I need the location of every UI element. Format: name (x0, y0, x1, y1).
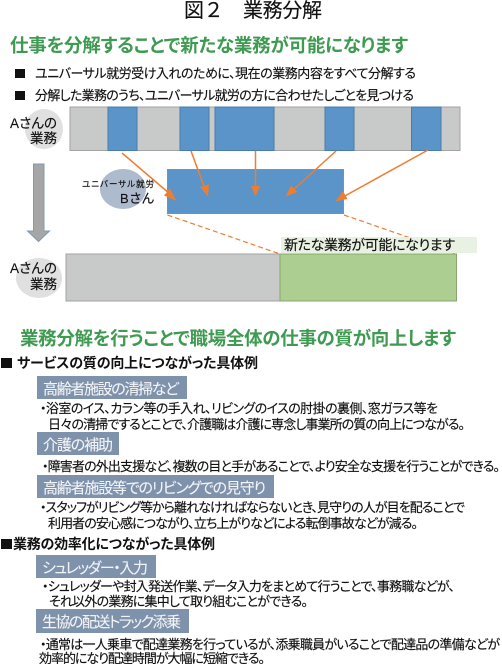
section heading: サービスの質の向上につながった具体例 (17, 355, 258, 371)
box: work assigned to B (168, 170, 344, 214)
bar: A's work split into segments (70, 107, 460, 150)
title: 図２ 業務分解 (184, 0, 322, 22)
text: shredder: それ以外の業務に集中して取り組むことができる。 (49, 594, 308, 609)
section heading: 業務の効率化につながった具体例 (13, 536, 215, 552)
label: facility cleaning: 高齢者施設の清掃など (43, 380, 180, 398)
arrow 4 (286, 151, 336, 196)
arrow 2 (191, 151, 209, 196)
label: universal employment person B: Bさん (120, 191, 154, 206)
label: A's work (top): 業務 (30, 131, 58, 146)
arrow 1 (122, 153, 176, 201)
arrows: tasks moved to B (122, 150, 428, 202)
bullet 2: 分解した業務のうち、ユニバーサル就労の方に合わせたしごとを見つける (35, 88, 414, 103)
diagram: work breakdown (10, 107, 477, 301)
text: watching: 利用者の安心感につながり、立ち上がりなどによる転倒事故などが減る。 (48, 516, 418, 531)
text: shredder (42, 579, 455, 609)
bullet 1: ユニバーサル就労受け入れのために、現在の業務内容をすべて分解する (35, 66, 416, 81)
label: delivery truck (36, 609, 189, 633)
label: care assistance (37, 432, 119, 455)
label: care assistance: 介護の補助 (43, 437, 113, 454)
segment: new work (280, 254, 456, 301)
label: shredder and input (36, 555, 156, 578)
section: efficiency examples (1, 536, 500, 664)
callout: new work possible: 新たな業務が可能になります (284, 237, 455, 253)
label: delivery truck: 生協の配送トラック添乗 (42, 614, 181, 631)
heading: quality improves: 業務分解を行うことで職場全体の仕事の質が向上します (20, 328, 456, 349)
dashed projection lines (168, 215, 457, 254)
text: cleaning: ・浴室のイス、カラン等の手入れ、リビングのイスの肘掛の裏側、窓ガラス等を (40, 401, 438, 416)
label: living room watching: 高齢者施設等でのリビングでの見守り (43, 479, 266, 497)
section: service quality examples (1, 355, 500, 531)
label: facility cleaning (37, 376, 187, 399)
arrow 3 (251, 151, 260, 196)
label: universal employment person B (82, 169, 154, 209)
bullet list (15, 66, 416, 103)
text: cleaning (40, 401, 465, 432)
bar: A's work after breakdown (66, 254, 456, 301)
label: A's work (top) (10, 109, 63, 149)
label: A's work (bottom): Aさんの (10, 261, 57, 276)
text: delivery: ・通常は一人乗車で配達業務を行っているが、添乗職員がいることで配達品の準備などが (40, 637, 500, 652)
text: watching: ・スタッフがリビング等から離れなければならないとき、見守りの人が目を配ることで (40, 500, 466, 515)
segment: remaining work (66, 254, 280, 301)
text: delivery (39, 637, 500, 664)
label: living room watching (37, 475, 274, 498)
text: care assistance: ・障害者の外出支援など、複数の目と手があることで、より安全な支援を行うことができる。 (42, 459, 500, 474)
text: cleaning: 日々の清掃でするとことで、介護職は介護に専念し事業所の質の向上につながる。 (48, 417, 465, 432)
label: shredder and input: シュレッダー・入力 (42, 560, 148, 577)
text: shredder: ・シュレッダーや封入発送作業、データ入力をまとめて行うことで、事務職などが、 (42, 579, 455, 594)
arrow 5 (336, 150, 428, 202)
heading: new work becomes possible: 仕事を分解することで新たな業務が可能になります (10, 35, 408, 56)
label: A's work (bottom): 業務 (30, 277, 58, 292)
label: A's work (top): Aさんの (10, 116, 57, 131)
text: watching (40, 500, 466, 531)
icon: grey down arrow (28, 164, 50, 242)
label: A's work (bottom) (10, 258, 62, 298)
label: universal employment person B: ユニバーサル就労 (82, 179, 154, 189)
